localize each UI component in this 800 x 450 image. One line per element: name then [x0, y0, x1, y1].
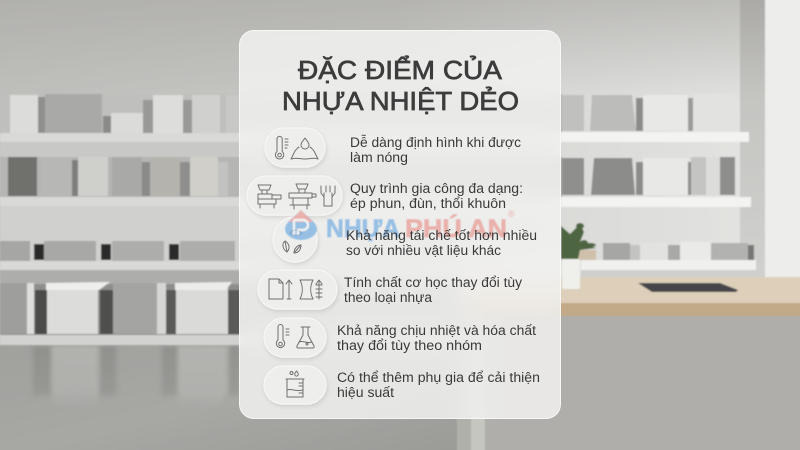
right shelf 1 items	[562, 95, 584, 131]
text: thay đổi tùy theo nhóm	[337, 338, 482, 353]
text: làm nóng	[350, 150, 408, 165]
text: so với nhiều vật liệu khác	[346, 243, 501, 258]
icon pill: thermometer and flask	[264, 318, 326, 357]
text	[350, 135, 521, 165]
item 5: heat and chemical resistance	[264, 318, 536, 357]
text: Khả năng chịu nhiệt và hóa chất	[337, 323, 536, 338]
text	[344, 275, 522, 305]
text: hiệu suất	[337, 385, 394, 400]
text: Tính chất cơ học thay đổi tùy	[344, 275, 522, 290]
item 1: easy to shape when heated	[265, 128, 521, 167]
plant	[561, 223, 596, 259]
floor and lower wall	[0, 345, 465, 450]
watermark logo	[285, 209, 515, 243]
text: Dễ dàng định hình khi được	[350, 135, 521, 150]
logo mark	[285, 210, 317, 240]
item 6: additives	[264, 366, 540, 404]
icon pill: thermometer and droplet	[265, 128, 325, 167]
text	[337, 370, 540, 400]
right wall columns	[740, 0, 766, 280]
center shelves seen through the card	[240, 94, 562, 133]
lower wall and left shelf 4 boxes	[0, 270, 240, 335]
item 2: diverse processing	[247, 176, 523, 215]
icon pill: beaker with drops	[264, 366, 326, 404]
text: theo loại nhựa	[344, 290, 432, 305]
right shelf 3 boxes	[578, 250, 596, 260]
left shelf 3 boxes	[0, 241, 240, 261]
wordmark: NHỰA	[326, 215, 400, 243]
glass card panel	[239, 30, 561, 419]
text	[346, 228, 537, 258]
table leg	[457, 316, 471, 450]
icon pill: leaves	[273, 217, 317, 262]
icon pill: sheet and stress arrows	[258, 270, 337, 309]
plant pot	[562, 259, 580, 289]
left shelf 2 items	[0, 157, 240, 197]
text: Quy trình gia công đa dạng:	[350, 181, 523, 196]
wooden counter	[465, 277, 800, 303]
watermark logo: ®	[508, 209, 515, 219]
title: ĐẶC ĐIỂM CỦA	[298, 55, 502, 85]
watermark logo: PHÚ AN	[405, 213, 507, 243]
text	[337, 323, 536, 353]
left shelf boards	[0, 133, 240, 142]
text: Có thể thêm phụ gia để cải thiện	[337, 370, 540, 385]
item 4: mechanical properties	[258, 270, 522, 309]
left shelf 1 items	[0, 94, 240, 133]
text: ép phun, đùn, thổi khuôn	[350, 196, 506, 211]
text: Khả năng tái chế tốt hơn nhiều	[346, 228, 537, 243]
text	[350, 181, 523, 211]
right shelf boards	[561, 132, 749, 142]
item 3: recyclable	[273, 209, 537, 262]
title	[282, 55, 519, 116]
right shelf 2 items	[562, 158, 584, 195]
tablet	[638, 283, 738, 292]
icon pill: injection, extrusion, blow molding	[247, 176, 342, 215]
title: NHỰA NHIỆT DẺO	[282, 86, 519, 116]
